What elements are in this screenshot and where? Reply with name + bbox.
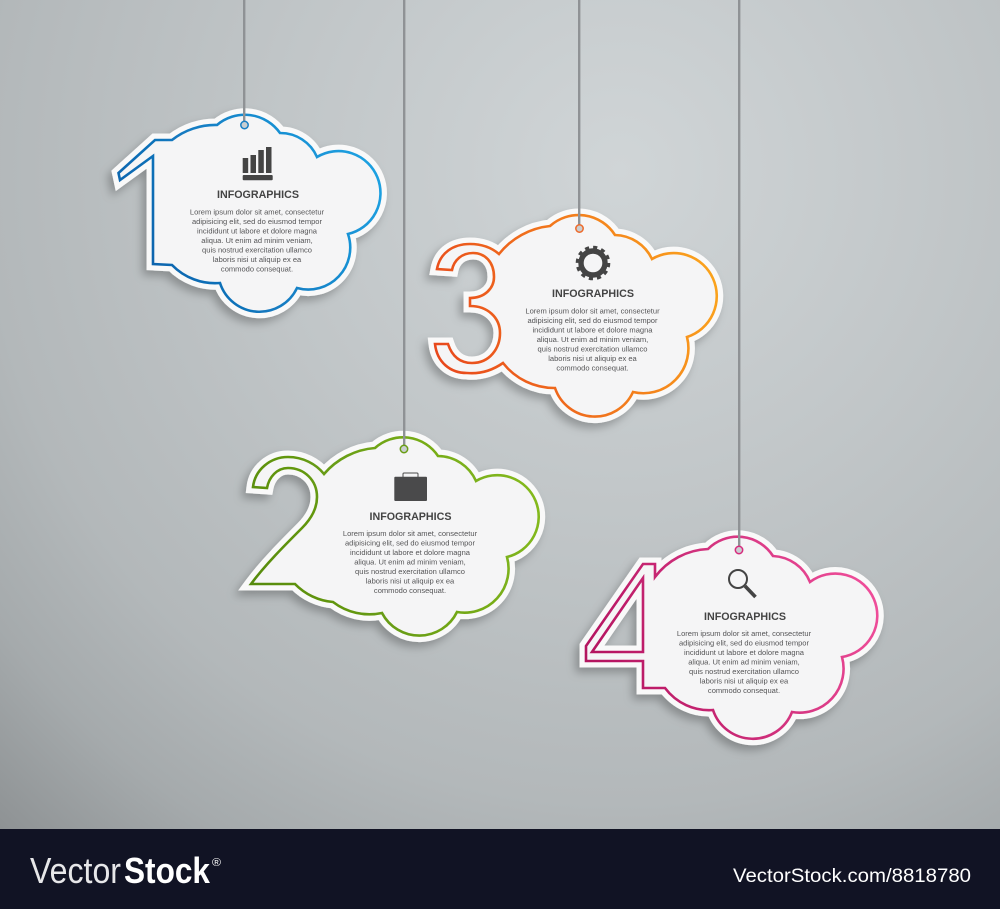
hanging string 2 xyxy=(400,0,408,453)
hanging string 4 xyxy=(735,0,743,554)
text block 2: commodo consequat. xyxy=(374,586,446,595)
text block 4: adipisicing elit, sed do eiusmod tempor xyxy=(679,638,810,648)
text block 3: aliqua. Ut enim ad minim veniam, xyxy=(537,335,648,344)
text block 1: Lorem ipsum dolor sit amet, consectetur xyxy=(190,208,325,216)
text block 1: quis nostrud exercitation ullamco xyxy=(202,246,312,254)
icon: bar chart xyxy=(243,147,273,180)
logo: VectorStock: Stock xyxy=(124,850,211,891)
logo: VectorStock xyxy=(30,850,221,891)
icon: magnifier xyxy=(729,570,756,597)
card shape: numeral 1 cloud xyxy=(118,115,380,312)
card shape: numeral 2 cloud xyxy=(251,437,539,636)
text block 2: incididunt ut labore et dolore magna xyxy=(350,548,471,557)
text block 3: commodo consequat. xyxy=(556,364,629,372)
text block 1: adipisicing elit, sed do eiusmod tempor xyxy=(192,217,323,226)
hanging string 3 xyxy=(576,0,583,232)
text block 1 xyxy=(190,208,325,274)
hanging string 1 xyxy=(241,0,248,129)
text block 3: quis nostrud exercitation ullamco xyxy=(538,344,647,354)
text block 3: adipisicing elit, sed do eiusmod tempor xyxy=(527,316,658,325)
text block 4: aliqua. Ut enim ad minim veniam, xyxy=(688,658,800,666)
text block 2: laboris nisi ut aliquip ex ea xyxy=(366,576,455,586)
card shape: numeral 4 cloud xyxy=(586,537,877,739)
icon: gear xyxy=(578,248,608,278)
text block 1: aliqua. Ut enim ad minim veniam, xyxy=(201,236,313,245)
heading 3: INFOGRAPHICS xyxy=(552,288,634,300)
panel: cloud 4 xyxy=(586,0,877,739)
text block 2: aliqua. Ut enim ad minim veniam, xyxy=(354,558,466,566)
text block 3: laboris nisi ut aliquip ex ea xyxy=(548,354,638,363)
text block 3: incididunt ut labore et dolore magna xyxy=(532,326,653,334)
heading 2: INFOGRAPHICS xyxy=(370,511,451,523)
heading 1: INFOGRAPHICS xyxy=(217,189,299,201)
text block 3 xyxy=(525,306,660,372)
text block 4: incididunt ut labore et dolore magna xyxy=(684,648,805,657)
text block 4: commodo consequat. xyxy=(708,686,780,695)
card shape: numeral 3 cloud xyxy=(435,215,717,417)
text block 2: adipisicing elit, sed do eiusmod tempor xyxy=(345,538,476,548)
text block 4: quis nostrud exercitation ullamco xyxy=(689,667,799,676)
logo: VectorStock: Vector xyxy=(30,850,121,891)
text block 4: laboris nisi ut aliquip ex ea xyxy=(700,676,789,686)
text block 4 xyxy=(677,629,812,695)
text block 4: Lorem ipsum dolor sit amet, consectetur xyxy=(677,629,812,638)
text block 2: Lorem ipsum dolor sit amet, consectetur xyxy=(343,529,478,538)
image id: VectorStock.com/8818780 xyxy=(733,865,971,887)
panel: cloud 2 xyxy=(251,0,539,636)
text block 1: laboris nisi ut aliquip ex ea xyxy=(213,255,302,264)
icon: briefcase xyxy=(394,473,427,501)
text block 3: Lorem ipsum dolor sit amet, consectetur xyxy=(525,306,660,316)
heading 4: INFOGRAPHICS xyxy=(704,611,786,623)
panel: cloud 3 xyxy=(435,0,717,417)
text block 1: commodo consequat. xyxy=(221,264,293,274)
text block 1: incididunt ut labore et dolore magna xyxy=(197,226,318,236)
text block 2 xyxy=(343,529,478,595)
logo: VectorStock: ® xyxy=(212,857,221,869)
text block 2: quis nostrud exercitation ullamco xyxy=(355,567,465,576)
footer bar xyxy=(0,829,1000,909)
panel: cloud 1 xyxy=(118,0,380,312)
